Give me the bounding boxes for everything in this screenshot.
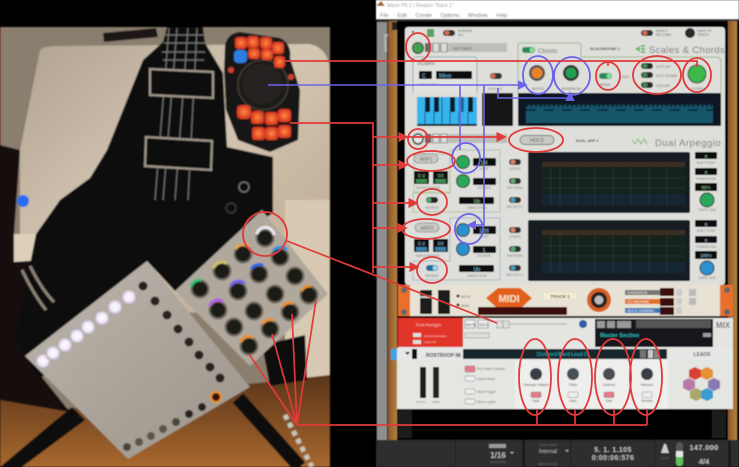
master section: Master Section — [600, 333, 640, 339]
arp 1 right controls: 0 — [705, 154, 708, 159]
chords toggle: Chords — [538, 49, 557, 55]
arp 1 section: G8 — [437, 173, 444, 178]
arp 1 right controls: GATE LEN — [698, 208, 716, 212]
sync mode: Internal — [539, 449, 557, 455]
window title bar — [376, 0, 739, 19]
lamp stripes — [22, 266, 54, 310]
pickup 1 — [150, 69, 213, 98]
arp 2 step grid — [528, 220, 690, 281]
lit pads — [36, 290, 136, 368]
arp 2 lane toggles: STEPS — [509, 235, 521, 239]
top bar: BYPASS — [458, 29, 472, 33]
arp 1 section: ARP1 — [419, 157, 433, 163]
arp 1 right controls: SHIFT STEP — [696, 161, 716, 165]
arp 2 section: STEP — [479, 235, 489, 239]
mode buttons: Hybrid Mode — [477, 377, 495, 381]
annotation: blue connectors — [268, 56, 590, 244]
arp 1 lane toggles — [506, 159, 524, 209]
macro knob 4: Reverb — [641, 399, 653, 403]
browser strip — [377, 22, 387, 440]
quantize: 1/16 — [490, 451, 506, 460]
add toggles: COLOR — [656, 84, 670, 88]
metronome — [661, 444, 669, 460]
arp 1 lane toggles: PATTERN — [507, 186, 523, 190]
patch display: Distorted Band Lead 01 — [537, 352, 589, 358]
scales toggle: SCALES — [488, 87, 502, 91]
photo: guitar and MIDI controllers — [0, 27, 330, 467]
black box with small display — [482, 93, 513, 126]
filter button — [688, 64, 706, 91]
arp 1 lane toggles: VELOCITY — [506, 205, 524, 209]
position readout: 5. 1. 1.105 — [594, 447, 632, 454]
top bar: DEBUT — [656, 29, 669, 33]
note and mod labels — [456, 294, 471, 308]
arp 1 section: OCTAVE — [477, 186, 492, 190]
position readout: 0:00:06:576 — [592, 455, 634, 462]
jog wheel — [238, 60, 288, 110]
guitar knob rings — [226, 182, 249, 213]
neck strings — [155, 28, 205, 200]
arp 1 section: REPEAT — [425, 206, 440, 210]
chords outline — [518, 43, 721, 93]
arp 1 section: STEP — [479, 167, 489, 171]
panel: instrument header: ROSTRVOP 06 — [426, 353, 461, 359]
knobs — [192, 230, 318, 354]
filter button: FILTER — [691, 87, 703, 91]
mix label: MIX — [716, 321, 731, 330]
scales box — [413, 57, 477, 93]
arp 2 section: 1 — [483, 248, 486, 254]
arp 1 section: 1/4 — [481, 160, 488, 166]
wheel controller — [224, 32, 300, 152]
dual arpeggio header: HOLD — [530, 138, 544, 144]
icon: scales — [635, 45, 645, 53]
arp 2 section: OCTAVE — [477, 254, 492, 258]
orange knob — [587, 288, 611, 312]
software interface — [376, 0, 739, 467]
notes knob — [529, 65, 545, 91]
macro knob 1: Gain — [532, 399, 540, 403]
wood rails — [388, 21, 397, 440]
track display — [478, 307, 567, 315]
pillow — [20, 44, 330, 320]
panel: external MIDI device — [398, 285, 733, 316]
tempo and meter — [689, 443, 719, 466]
macro knob 2: Filter — [569, 383, 578, 387]
scales box: Scales — [417, 61, 435, 67]
tempo and meter: 4/4 — [699, 457, 710, 466]
red channel label: Insert FX — [424, 340, 436, 344]
arp 1 right controls: 0 — [705, 170, 708, 175]
orange button — [211, 392, 221, 402]
mode buttons — [465, 366, 505, 404]
arp 1 section: DIRECTION — [467, 206, 487, 210]
arp 2 section: 1/16 — [479, 228, 489, 234]
routing rows: OVERDRIVE — [627, 291, 648, 295]
arp 1 step grid — [528, 152, 690, 213]
shelf object — [103, 28, 158, 42]
menu: File Edit Create Options Window Help — [380, 13, 507, 19]
rack: Browser — [382, 34, 388, 53]
sync mode: SYNC MODE — [539, 443, 557, 447]
icon: hex cubes — [683, 367, 720, 401]
guitar body — [15, 27, 273, 380]
routing rows — [625, 288, 696, 315]
track label — [543, 293, 577, 299]
arp 1 section: INPUT RANGE — [416, 186, 441, 190]
panel: scales and chords — [405, 27, 725, 285]
add toggles: OCT UP — [656, 65, 671, 69]
arp 2 right controls: 0 — [705, 222, 708, 227]
macro knob 3 — [603, 368, 615, 403]
macro knob 1: Damper Attack — [524, 383, 549, 387]
arp 2 right controls: GATE LEN — [698, 276, 716, 280]
tempo slider — [676, 442, 683, 466]
master section — [595, 319, 713, 347]
arp 1 right controls: TRANSPOSE — [696, 177, 717, 181]
scales box: KEY SCALE — [420, 82, 437, 86]
add toggles: OCT DOWN — [656, 74, 677, 78]
macro knob 2: Gain — [569, 399, 577, 403]
arp 1 lane toggles: STEPS — [509, 167, 521, 171]
MIDI badge: MIDI — [498, 294, 520, 305]
red channel label: Send Automation — [424, 334, 447, 338]
launchpad — [25, 261, 250, 459]
right cloth — [285, 200, 330, 385]
patch display — [463, 349, 667, 359]
rack ears — [398, 410, 726, 438]
category: LEADS — [694, 352, 711, 358]
macro knob 3: Gain — [605, 399, 613, 403]
arp 2 section: G8 — [437, 241, 444, 246]
position readout — [592, 447, 634, 462]
knob LED arcs — [191, 227, 310, 341]
faders — [420, 290, 450, 314]
tempo and meter: 147.000 — [689, 443, 719, 452]
sync mode: SEND CLOCK — [538, 462, 558, 466]
keyboard display — [417, 97, 477, 126]
pad grid — [37, 290, 212, 445]
red channel label — [398, 318, 463, 347]
mode buttons: Mono Legato — [477, 400, 496, 404]
rack — [376, 19, 739, 440]
arp 2 section: Up — [474, 267, 480, 273]
pan knob — [579, 320, 587, 328]
patch name: Init Patch — [453, 46, 472, 51]
blue highlight circles — [452, 56, 590, 244]
transport bar — [376, 440, 739, 467]
macro knob 1 — [524, 368, 549, 403]
mode toggle: MODE — [600, 83, 611, 87]
window title: Wave PK 2 / Reason "Rack 1" — [387, 3, 454, 9]
metronome: CLICK — [661, 456, 669, 460]
arp 1 section: C-2 — [418, 173, 426, 178]
dual arpeggio header — [413, 134, 721, 149]
title: Scales & Chords — [649, 45, 725, 56]
mode toggle — [599, 73, 612, 87]
left dark object — [0, 145, 130, 412]
sync mode — [538, 443, 569, 466]
inversion knob — [561, 65, 581, 91]
patch label: SCALEBOUND 1 — [590, 47, 620, 51]
pitch and mod wheels — [416, 367, 440, 404]
top bar: ALL — [458, 33, 464, 37]
top bar: TRACK — [697, 33, 710, 37]
arp 2 right controls: 100% — [700, 253, 712, 258]
panel: instrument header — [391, 348, 733, 360]
arp 2 right controls: SHIFT STEP — [696, 229, 716, 233]
dark object under knob panel — [262, 335, 307, 386]
pickup 2 — [145, 137, 212, 170]
add toggles — [622, 63, 677, 88]
lamp — [12, 234, 70, 300]
top bar — [412, 28, 712, 38]
annotation: red connectors — [243, 33, 711, 425]
pitch and mod wheels: PITCH — [416, 400, 426, 404]
floor — [0, 375, 330, 467]
quantize: QUANTIZE — [490, 460, 506, 464]
scales toggle — [488, 73, 502, 91]
note and mod labels: MOD — [461, 304, 470, 308]
arp 2 right controls: 0 — [705, 238, 708, 243]
guitar stand — [0, 407, 85, 467]
app icon — [377, 1, 385, 6]
arp 1 right controls — [695, 152, 717, 212]
arp 2 right controls — [695, 220, 717, 280]
dual arpeggio header: Dual Arpeggio — [655, 138, 721, 149]
top bar: RECORD — [656, 33, 672, 37]
macro knob 3: Distord — [603, 383, 615, 387]
arp 1 section: Up — [474, 199, 480, 205]
routing rows: MULTI CHANNEL — [627, 309, 655, 313]
arp 2 section: C-2 — [418, 241, 426, 246]
red highlight ellipses — [243, 33, 711, 415]
level fader — [497, 321, 567, 328]
routing rows: CC MACHINE — [627, 300, 650, 304]
device power button — [412, 42, 424, 54]
notes knob: NOTES — [532, 87, 545, 91]
panel: instrument controls — [397, 360, 733, 409]
macro knob 2 — [567, 368, 579, 403]
dual arpeggio header: DUAL ARP 1 — [576, 139, 599, 143]
blue pad — [234, 50, 247, 63]
top bar: SAVE TO — [697, 29, 712, 33]
note and mod labels: NOTE — [461, 295, 471, 299]
macro knob 4: Reverb — [641, 383, 653, 387]
arp 2 right controls: TRANSPOSE — [696, 245, 717, 249]
macro knob 4 — [641, 368, 653, 403]
arp 2 section: INPUT RANGE — [416, 254, 441, 258]
mute solo: SOLO — [479, 323, 489, 327]
mute solo — [465, 320, 489, 338]
knob controller — [175, 210, 328, 366]
arp 2 lane toggles: VELOCITY — [506, 273, 524, 277]
arp 1 right controls: 89% — [701, 185, 711, 190]
blue LED — [17, 195, 29, 207]
red channel label: Dual Arpeggio — [416, 322, 442, 327]
arp 2 lane toggles: PATTERN — [507, 254, 523, 258]
arp 2 section: REPEAT — [425, 274, 440, 278]
arp 2 section: DIRECTION — [467, 274, 487, 278]
chords toggle — [522, 47, 557, 55]
track label: TRACK 1 — [550, 294, 570, 299]
mute solo: MUTE — [466, 323, 477, 327]
patch name — [425, 43, 507, 52]
scales box: C — [422, 74, 426, 80]
mode buttons: Mono Trigger — [477, 390, 497, 394]
arp 2 section: ARP2 — [420, 226, 434, 232]
mode buttons: Key Pattern Sustain — [477, 367, 505, 371]
quantize — [489, 444, 514, 464]
arp 2 lane toggles — [506, 227, 524, 277]
panel: mixer channel — [398, 318, 733, 348]
MIDI badge — [486, 288, 532, 309]
add toggles: ADD — [622, 75, 630, 79]
arp 2 section — [413, 218, 500, 280]
chord key display — [518, 93, 721, 126]
cable — [238, 398, 300, 467]
inversion knob: INVERSION — [561, 87, 581, 91]
side buttons — [123, 282, 224, 451]
scales box: Minor — [439, 74, 452, 80]
pitch and mod wheels: MOD — [432, 400, 440, 404]
top pads — [235, 36, 291, 140]
arp 1 section — [413, 150, 500, 212]
